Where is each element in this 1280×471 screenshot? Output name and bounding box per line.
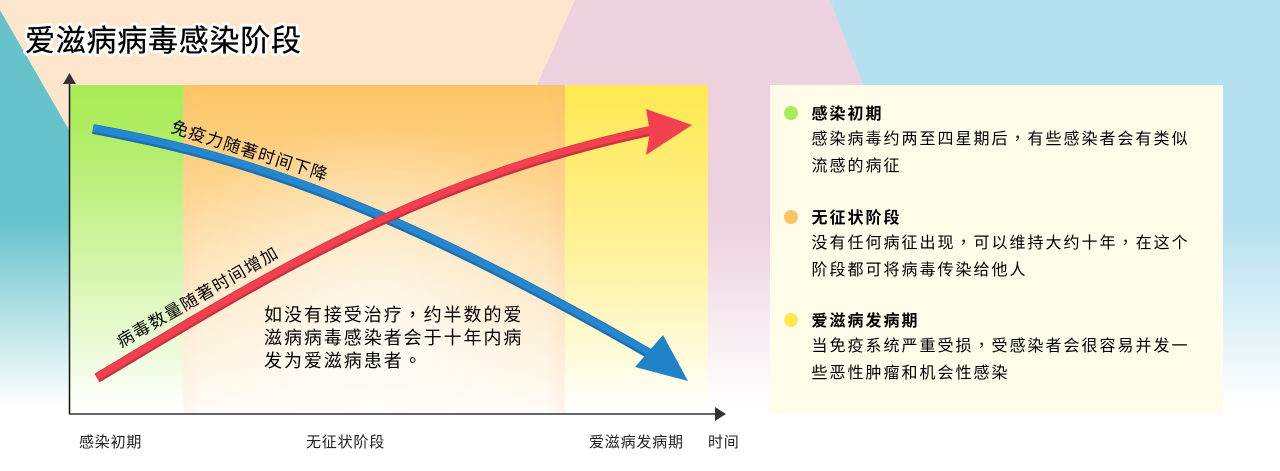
y axis xyxy=(63,73,76,414)
x axis stage labels: 感染初期 xyxy=(79,434,142,451)
x axis xyxy=(69,407,726,421)
band: asymptomatic stage xyxy=(184,85,565,414)
legend item: asymptomatic: 没有任何病征出现，可以维持大约十年，在这个 xyxy=(812,229,1190,253)
arrow: viral load increasing xyxy=(97,109,692,378)
band: AIDS stage xyxy=(565,85,708,414)
legend item: early infection: 感染初期 xyxy=(812,104,884,123)
legend item: early infection: 感染病毒约两至四星期后，有些感染者会有类似 xyxy=(812,125,1190,149)
label: immunity decreases over time: 免疫力随著时间下降 xyxy=(169,118,331,185)
title: 爱滋病病毒感染阶段 xyxy=(25,25,302,58)
x axis stage labels: 时间 xyxy=(708,434,740,451)
legend item: early infection xyxy=(784,104,1190,175)
x axis stage labels xyxy=(79,434,740,451)
legend item: AIDS stage: 爱滋病发病期 xyxy=(812,311,920,330)
label: viral load increases over time: 病毒数量随著时间增加 xyxy=(114,243,282,351)
x axis stage labels: 无征状阶段 xyxy=(306,434,385,451)
note: text in chart: 如没有接受治疗，约半数的爱 xyxy=(264,301,523,327)
x axis stage labels: 爱滋病发病期 xyxy=(589,434,684,451)
legend item: AIDS stage: 些恶性肿瘤和机会性感染 xyxy=(812,364,1010,382)
title: 爱滋病病毒感染阶段 xyxy=(25,25,302,58)
legend item: early infection: 流感的病征 xyxy=(812,157,902,175)
chart xyxy=(63,73,740,451)
panel: legend xyxy=(770,85,1223,414)
legend item: AIDS stage xyxy=(784,311,1190,382)
legend item: asymptomatic xyxy=(784,208,1190,279)
arrow: immunity decreasing xyxy=(93,128,688,381)
note: text in chart: 发为爱滋病患者。 xyxy=(264,347,424,373)
note: text in chart: 滋病病毒感染者会于十年内病 xyxy=(264,328,523,348)
legend item: asymptomatic: 阶段都可将病毒传染给他人 xyxy=(812,261,1028,279)
legend item: asymptomatic: 无征状阶段 xyxy=(812,208,902,227)
legend item: AIDS stage: 当免疫系统严重受损，受感染者会很容易并发一 xyxy=(812,332,1190,356)
band: infection early stage xyxy=(70,85,184,414)
note: text in chart xyxy=(264,301,523,373)
